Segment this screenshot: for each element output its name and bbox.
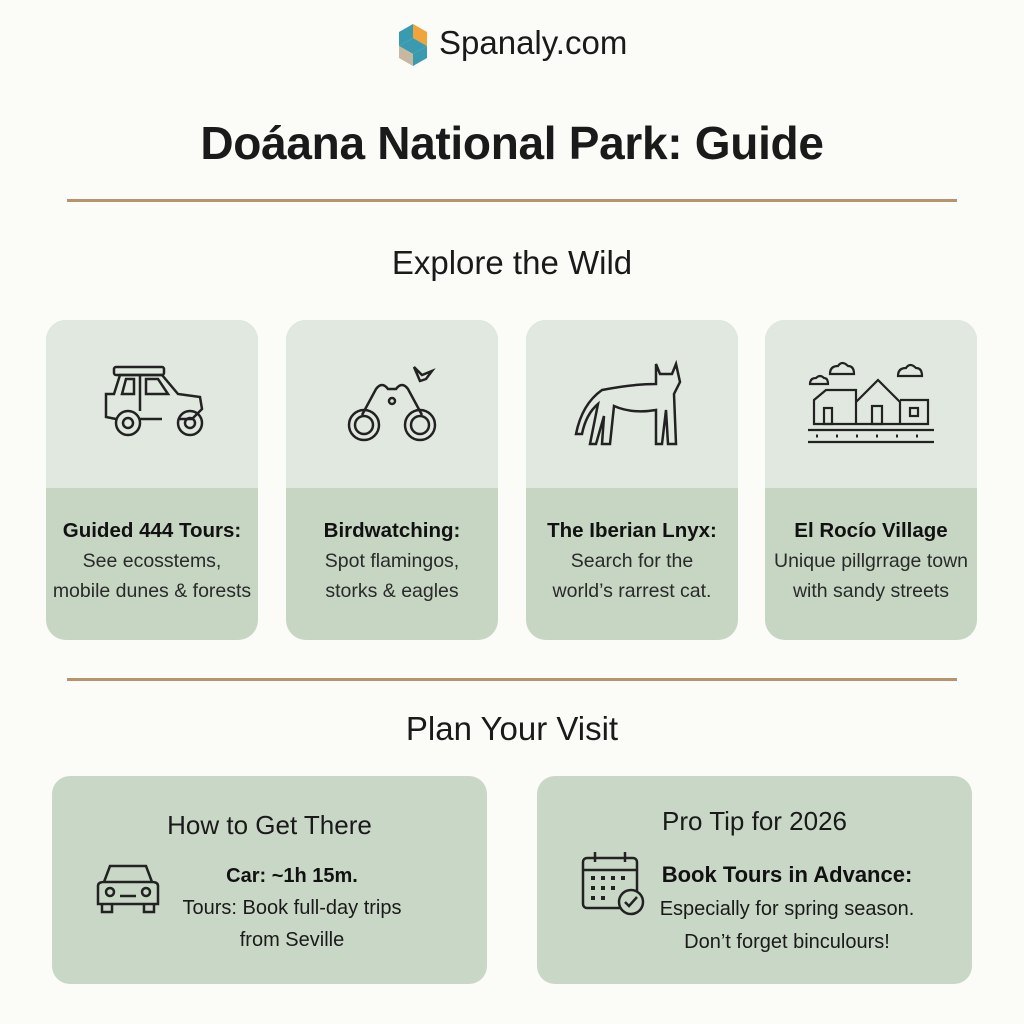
panel: pro tip: Especially for spring season. <box>660 898 914 920</box>
card: birdwatching <box>286 320 498 640</box>
icon: car <box>96 864 160 914</box>
card: birdwatching: Birdwatching: <box>324 519 460 542</box>
panel: pro tip: Don’t forget binculours! <box>684 931 890 953</box>
card: lynx: world’s rarrest cat. <box>553 580 711 602</box>
panel: get there: How to Get There <box>167 810 372 840</box>
card: village <box>765 320 977 640</box>
heading: plan: Plan Your Visit <box>406 710 618 747</box>
card: tours: Guided 444 Tours: <box>63 519 241 542</box>
card: lynx: Search for the <box>571 550 693 572</box>
icon: calendar <box>582 852 644 916</box>
panel: pro tip <box>537 776 972 984</box>
card: tours: See ecosstems, <box>83 550 221 572</box>
panel: get there: Car: ~1h 15m. <box>226 865 358 887</box>
panel: get there: Tours: Book full-day trips <box>182 897 401 919</box>
card: birdwatching: storks & eagles <box>325 580 459 602</box>
card: tours <box>46 320 258 640</box>
panel: pro tip: Book Tours in Advance: <box>662 862 912 887</box>
panel: pro tip: Pro Tip for 2026 <box>662 806 847 836</box>
card: village: Unique pillgrrage town <box>774 550 968 572</box>
panel: get there: from Seville <box>240 929 344 951</box>
card: lynx: The Iberian Lnyx: <box>547 519 717 542</box>
card: village: with sandy streets <box>793 580 949 602</box>
card: village: El Rocío Village <box>794 519 948 542</box>
card: tours: mobile dunes & forests <box>53 580 251 602</box>
card: lynx <box>526 320 738 640</box>
card: birdwatching: Spot flamingos, <box>325 550 459 572</box>
heading: explore: Explore the Wild <box>392 244 632 281</box>
panel: get there <box>52 776 487 984</box>
logo: Spanaly.com <box>439 24 627 61</box>
title: Doáana National Park: Guide <box>200 117 824 169</box>
